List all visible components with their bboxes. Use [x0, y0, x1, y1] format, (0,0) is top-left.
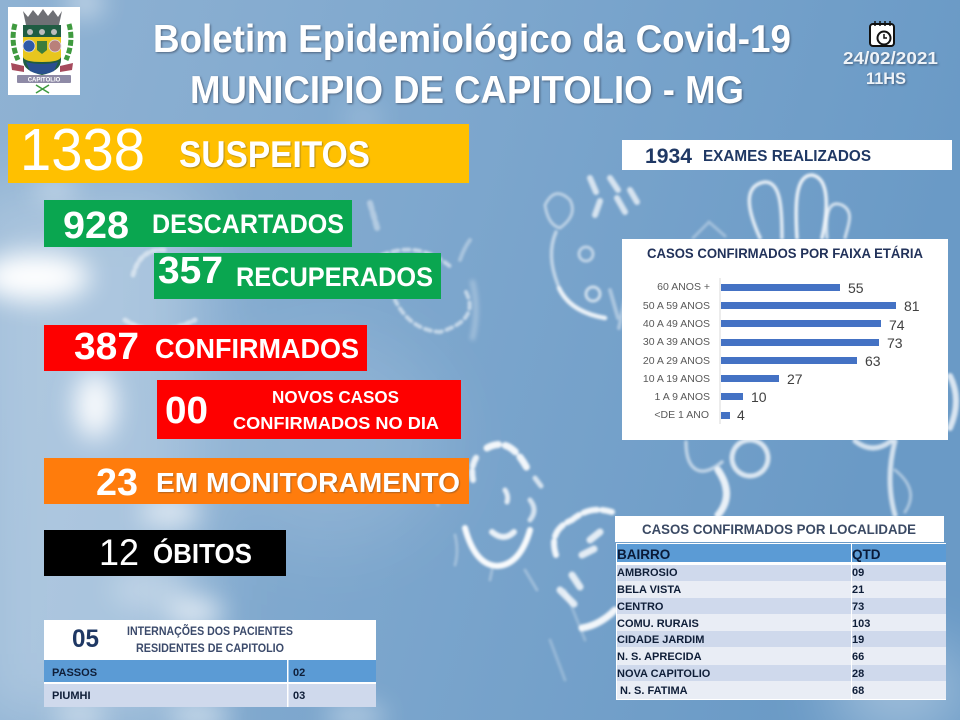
- panel: internacoes: 03: [293, 690, 305, 702]
- logo: municipal coat of arms: [8, 7, 80, 95]
- panel: casos por localidade table: 103: [852, 618, 870, 630]
- panel: em monitoramento: EM MONITORAMENTO: [156, 467, 460, 498]
- bar chart: casos por faixa etaria: 4: [737, 407, 745, 423]
- bar chart: casos por faixa etaria: 74: [889, 317, 905, 333]
- bar chart: casos por faixa etaria: 10: [751, 389, 767, 405]
- virus ring left: [125, 250, 195, 330]
- bar chart: casos por faixa etaria: 50 A 59 ANOS: [643, 300, 710, 312]
- panel: confirmados: [44, 325, 367, 371]
- bar chart: casos por faixa etaria: [622, 239, 948, 440]
- panel: internacoes: INTERNAÇÕES DOS PACIENTES: [127, 623, 293, 638]
- date and time: 11HS: [866, 69, 906, 88]
- panel: obitos: ÓBITOS: [153, 538, 252, 569]
- title: Boletim Epidemiológico da Covid-19: [153, 18, 791, 61]
- panel: casos por localidade table: 66: [852, 651, 864, 663]
- icon: calendar with clock: [870, 21, 894, 46]
- date and time: [843, 48, 938, 88]
- panel: recuperados: 357: [158, 250, 223, 292]
- bar chart: casos por faixa etaria: 10 A 19 ANOS: [643, 373, 710, 385]
- panel: suspeitos: SUSPEITOS: [179, 134, 370, 175]
- panel: casos por localidade table: BELA VISTA: [617, 584, 681, 596]
- panel: recuperados: RECUPERADOS: [236, 262, 433, 292]
- bar chart: casos por faixa etaria: 73: [887, 335, 903, 351]
- panel: casos por localidade table: 09: [852, 567, 864, 579]
- panel: descartados: DESCARTADOS: [152, 209, 344, 239]
- panel: obitos: 12: [99, 532, 139, 573]
- bar chart: casos por faixa etaria: <DE 1 ANO: [654, 409, 709, 421]
- bar chart: casos por faixa etaria: 20 A 29 ANOS: [643, 355, 710, 367]
- virus 1: [559, 288, 605, 318]
- panel: confirmados: CONFIRMADOS: [155, 333, 359, 364]
- bar chart: casos por faixa etaria: 55: [848, 280, 864, 296]
- panel: casos por localidade table: CENTRO: [617, 601, 664, 613]
- panel: suspeitos: 1338: [20, 117, 145, 183]
- chain lower right of left stack: [460, 240, 470, 260]
- panel: internacoes: PASSOS: [52, 667, 97, 679]
- panel: casos por localidade table: CASOS CONFIRMADOS POR LOCALIDADE: [642, 521, 916, 537]
- panel: novos casos: NOVOS CASOS: [272, 387, 399, 407]
- panel: recuperados: [154, 250, 441, 299]
- panel: confirmados: 387: [74, 326, 139, 368]
- bar chart: casos por faixa etaria: 27: [787, 371, 803, 387]
- panel: casos por localidade table: AMBROSIO: [617, 567, 678, 579]
- panel: casos por localidade table: N. S. FATIMA: [620, 685, 688, 697]
- virus 2: loops: [749, 182, 782, 238]
- virus 2 lower: [686, 442, 722, 471]
- panel: casos por localidade table: 68: [852, 685, 864, 697]
- panel: casos por localidade table: 73: [852, 601, 864, 613]
- panel: casos por localidade table: 19: [852, 634, 864, 646]
- panel: casos por localidade table: QTD: [852, 547, 881, 562]
- panel: exames realizados: 1934: [645, 145, 692, 168]
- bar chart: casos por faixa etaria: 63: [865, 353, 881, 369]
- panel: descartados: 928: [63, 205, 129, 247]
- logo: municipal coat of arms: CAPITOLIO: [28, 78, 61, 84]
- panel: internacoes: [44, 620, 376, 707]
- panel: casos por localidade table: 28: [852, 668, 864, 680]
- title: [153, 18, 791, 112]
- panel: novos casos: CONFIRMADOS NO DIA: [233, 413, 439, 433]
- bar chart: casos por faixa etaria: 60 ANOS +: [657, 281, 710, 293]
- panel: em monitoramento: [44, 458, 469, 504]
- panel: casos por localidade table: N. S. APRECIDA: [617, 651, 702, 663]
- panel: novos casos: 00: [165, 390, 208, 432]
- bar chart: casos por faixa etaria: 40 A 49 ANOS: [643, 318, 710, 330]
- panel: exames realizados: EXAMES REALIZADOS: [703, 148, 871, 165]
- title: MUNICIPIO DE CAPITOLIO - MG: [190, 69, 744, 112]
- virus near center left: [382, 250, 470, 332]
- panel: novos casos: [157, 380, 461, 439]
- panel: casos por localidade table: NOVA CAPITOLIO: [617, 668, 711, 680]
- panel: exames realizados: [622, 140, 952, 170]
- panel: casos por localidade table: 21: [852, 584, 864, 596]
- virus 4: [554, 510, 612, 555]
- virus 3: [472, 455, 478, 480]
- panel: casos por localidade table: CIDADE JARDIM: [617, 634, 704, 646]
- panel: descartados: [44, 200, 352, 247]
- panel: internacoes: PIUMHI: [52, 690, 90, 702]
- date and time: 24/02/2021: [843, 48, 938, 68]
- panel: em monitoramento: 23: [96, 462, 138, 504]
- bar chart: casos por faixa etaria: 30 A 39 ANOS: [643, 336, 710, 348]
- panel: casos por localidade table: COMU. RURAIS: [617, 618, 699, 630]
- panel: internacoes: 02: [293, 667, 305, 679]
- panel: internacoes: 05: [72, 625, 99, 653]
- panel: obitos: [44, 530, 286, 576]
- bar chart: casos por faixa etaria: 81: [904, 298, 920, 314]
- panel: casos por localidade table: BAIRRO: [617, 547, 670, 562]
- panel: suspeitos: [8, 117, 469, 183]
- bar chart: casos por faixa etaria: CASOS CONFIRMADOS POR FAIXA ETÁRIA: [647, 245, 923, 261]
- panel: casos por localidade table: [615, 516, 946, 700]
- bar chart: casos por faixa etaria: 1 A 9 ANOS: [655, 391, 710, 403]
- panel: internacoes: RESIDENTES DE CAPITOLIO: [136, 641, 284, 655]
